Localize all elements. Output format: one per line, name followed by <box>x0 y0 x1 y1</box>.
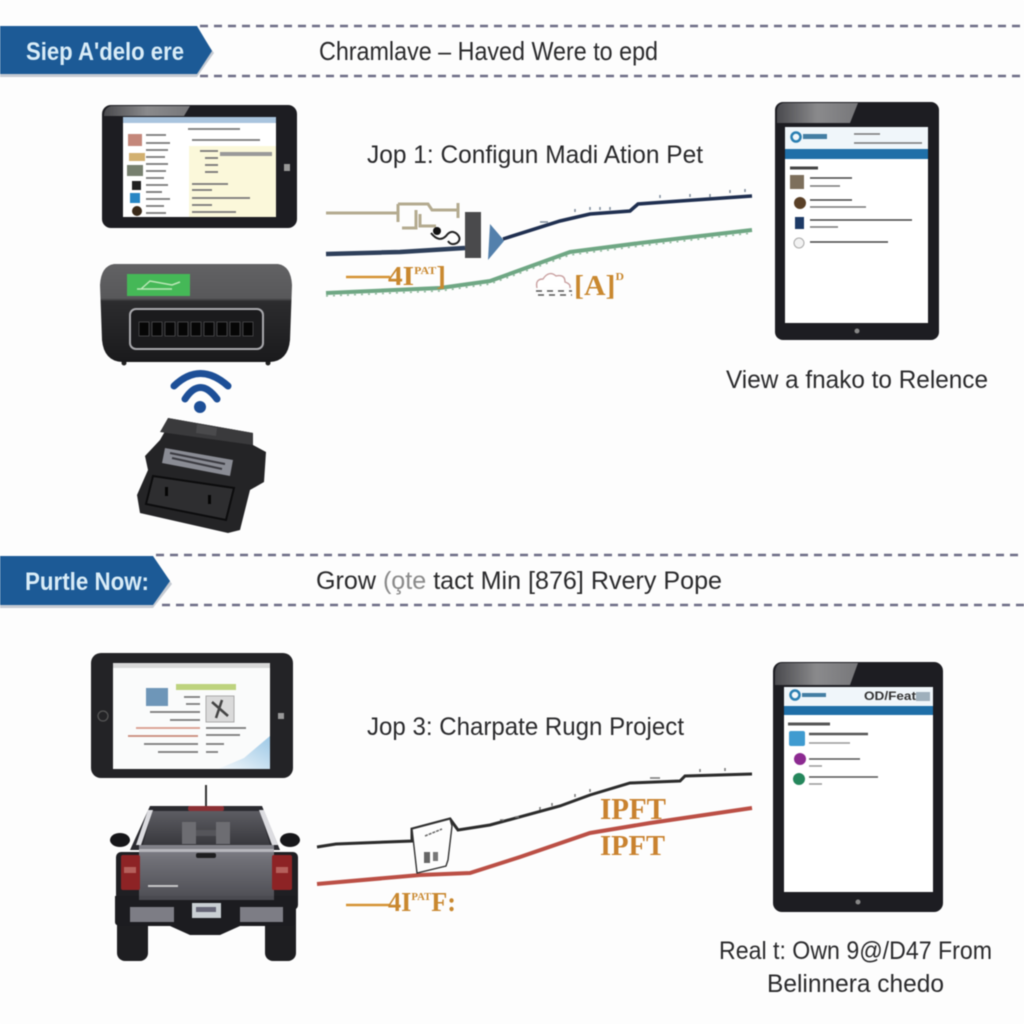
icon: portrait tablet, bottom right: OD/Feat <box>864 689 916 703</box>
icon: OBD dongle <box>137 418 266 533</box>
section 1 header band: Siep A'delo ere <box>26 38 184 66</box>
caption: top right tablet: View a fnako to Relence <box>726 366 988 394</box>
caption: bottom right tablet: Belinnera chedo <box>767 970 944 998</box>
label: section 2 orange upper: IPFT <box>600 791 666 826</box>
icon: portrait tablet, bottom right <box>773 662 943 912</box>
section 2 job heading: Jop 3: Charpate Rugn Project <box>367 713 684 741</box>
chart: section 2 signal paths <box>317 768 752 884</box>
icon: OBD interface box <box>100 264 292 366</box>
label: section 1 lower left orange: ] <box>436 261 446 291</box>
icon: pickup truck rear view <box>110 785 300 961</box>
section 2 header band: Purtle Now: <box>25 568 149 596</box>
section 2 heading: Grow (o̧te tact Min [876] Rvery Pope <box>316 567 722 595</box>
label: section 2 orange lower: PAT <box>411 891 432 903</box>
section 1 job heading: Jop 1: Configun Madi Ation Pet <box>367 141 703 169</box>
label: section 1 center orange with icon: [A] <box>574 271 613 302</box>
caption: bottom right tablet <box>719 937 992 998</box>
caption: bottom right tablet: Real t: Own 9@/D47 From <box>719 937 992 965</box>
section 2 header band <box>0 555 1024 608</box>
label: section 1 lower left orange: 4I <box>388 261 412 291</box>
label: section 1 lower left orange: PAT <box>414 265 437 277</box>
section 1 heading: Chramlave – Haved Were to epd <box>319 36 658 66</box>
icon: landscape tablet with software <box>102 105 297 228</box>
icon: landscape tablet with document <box>91 653 293 778</box>
icon: portrait tablet, top right <box>775 102 939 340</box>
label: section 2 orange lower <box>346 887 456 917</box>
label: section 2 orange lower: F: <box>431 887 456 917</box>
chart: section 1 signal paths <box>326 189 752 296</box>
label: section 1 lower left orange <box>346 261 446 291</box>
label: section 2 orange lower: 4I <box>388 887 412 917</box>
section 1 header band <box>0 26 1024 77</box>
label: section 1 center orange with icon <box>536 271 624 302</box>
icon: wifi signal <box>174 374 228 413</box>
label: section 1 center orange with icon: D <box>616 271 624 283</box>
label: section 2 orange middle: IPFT <box>600 830 665 862</box>
